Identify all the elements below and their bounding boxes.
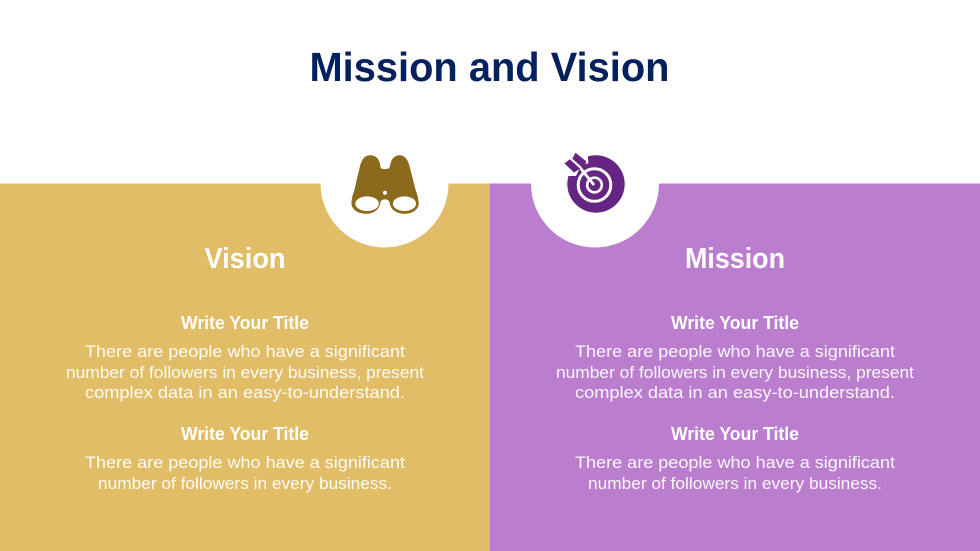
text block: vision item 2: [85, 424, 405, 493]
text block: vision item 1: number of followers in every business, present: [66, 363, 424, 382]
heading: mission: Mission: [685, 243, 785, 275]
text block: mission item 1: number of followers in every business, present: [556, 363, 914, 382]
text block: vision item 2: Write Your Title: [181, 424, 309, 444]
text block: vision item 2: number of followers in every business.: [98, 474, 392, 493]
text block: vision item 1: Write Your Title: [181, 313, 309, 333]
text block: mission item 1: There are people who have a significant: [575, 342, 895, 361]
text block: vision item 2: There are people who have a significant: [85, 453, 405, 472]
text block: mission item 2: number of followers in every business.: [588, 474, 882, 493]
heading: vision: Vision: [204, 243, 286, 275]
panel: vision: [0, 120, 490, 551]
text block: vision item 1: complex data in an easy-to-understand.: [85, 383, 405, 402]
icon: target with arrow: [560, 150, 625, 213]
panel: mission: [490, 120, 980, 551]
text block: mission item 2: [575, 424, 895, 493]
text block: mission item 1: [556, 313, 914, 402]
title: Mission and Vision: [310, 44, 670, 90]
text block: vision item 1: There are people who have a significant: [85, 342, 405, 361]
icon: binoculars: [352, 155, 419, 214]
text block: mission item 2: There are people who have a significant: [575, 453, 895, 472]
text block: mission item 1: complex data in an easy-to-understand.: [575, 383, 895, 402]
text block: mission item 1: Write Your Title: [671, 313, 799, 333]
text block: vision item 1: [66, 313, 424, 402]
text block: mission item 2: Write Your Title: [671, 424, 799, 444]
